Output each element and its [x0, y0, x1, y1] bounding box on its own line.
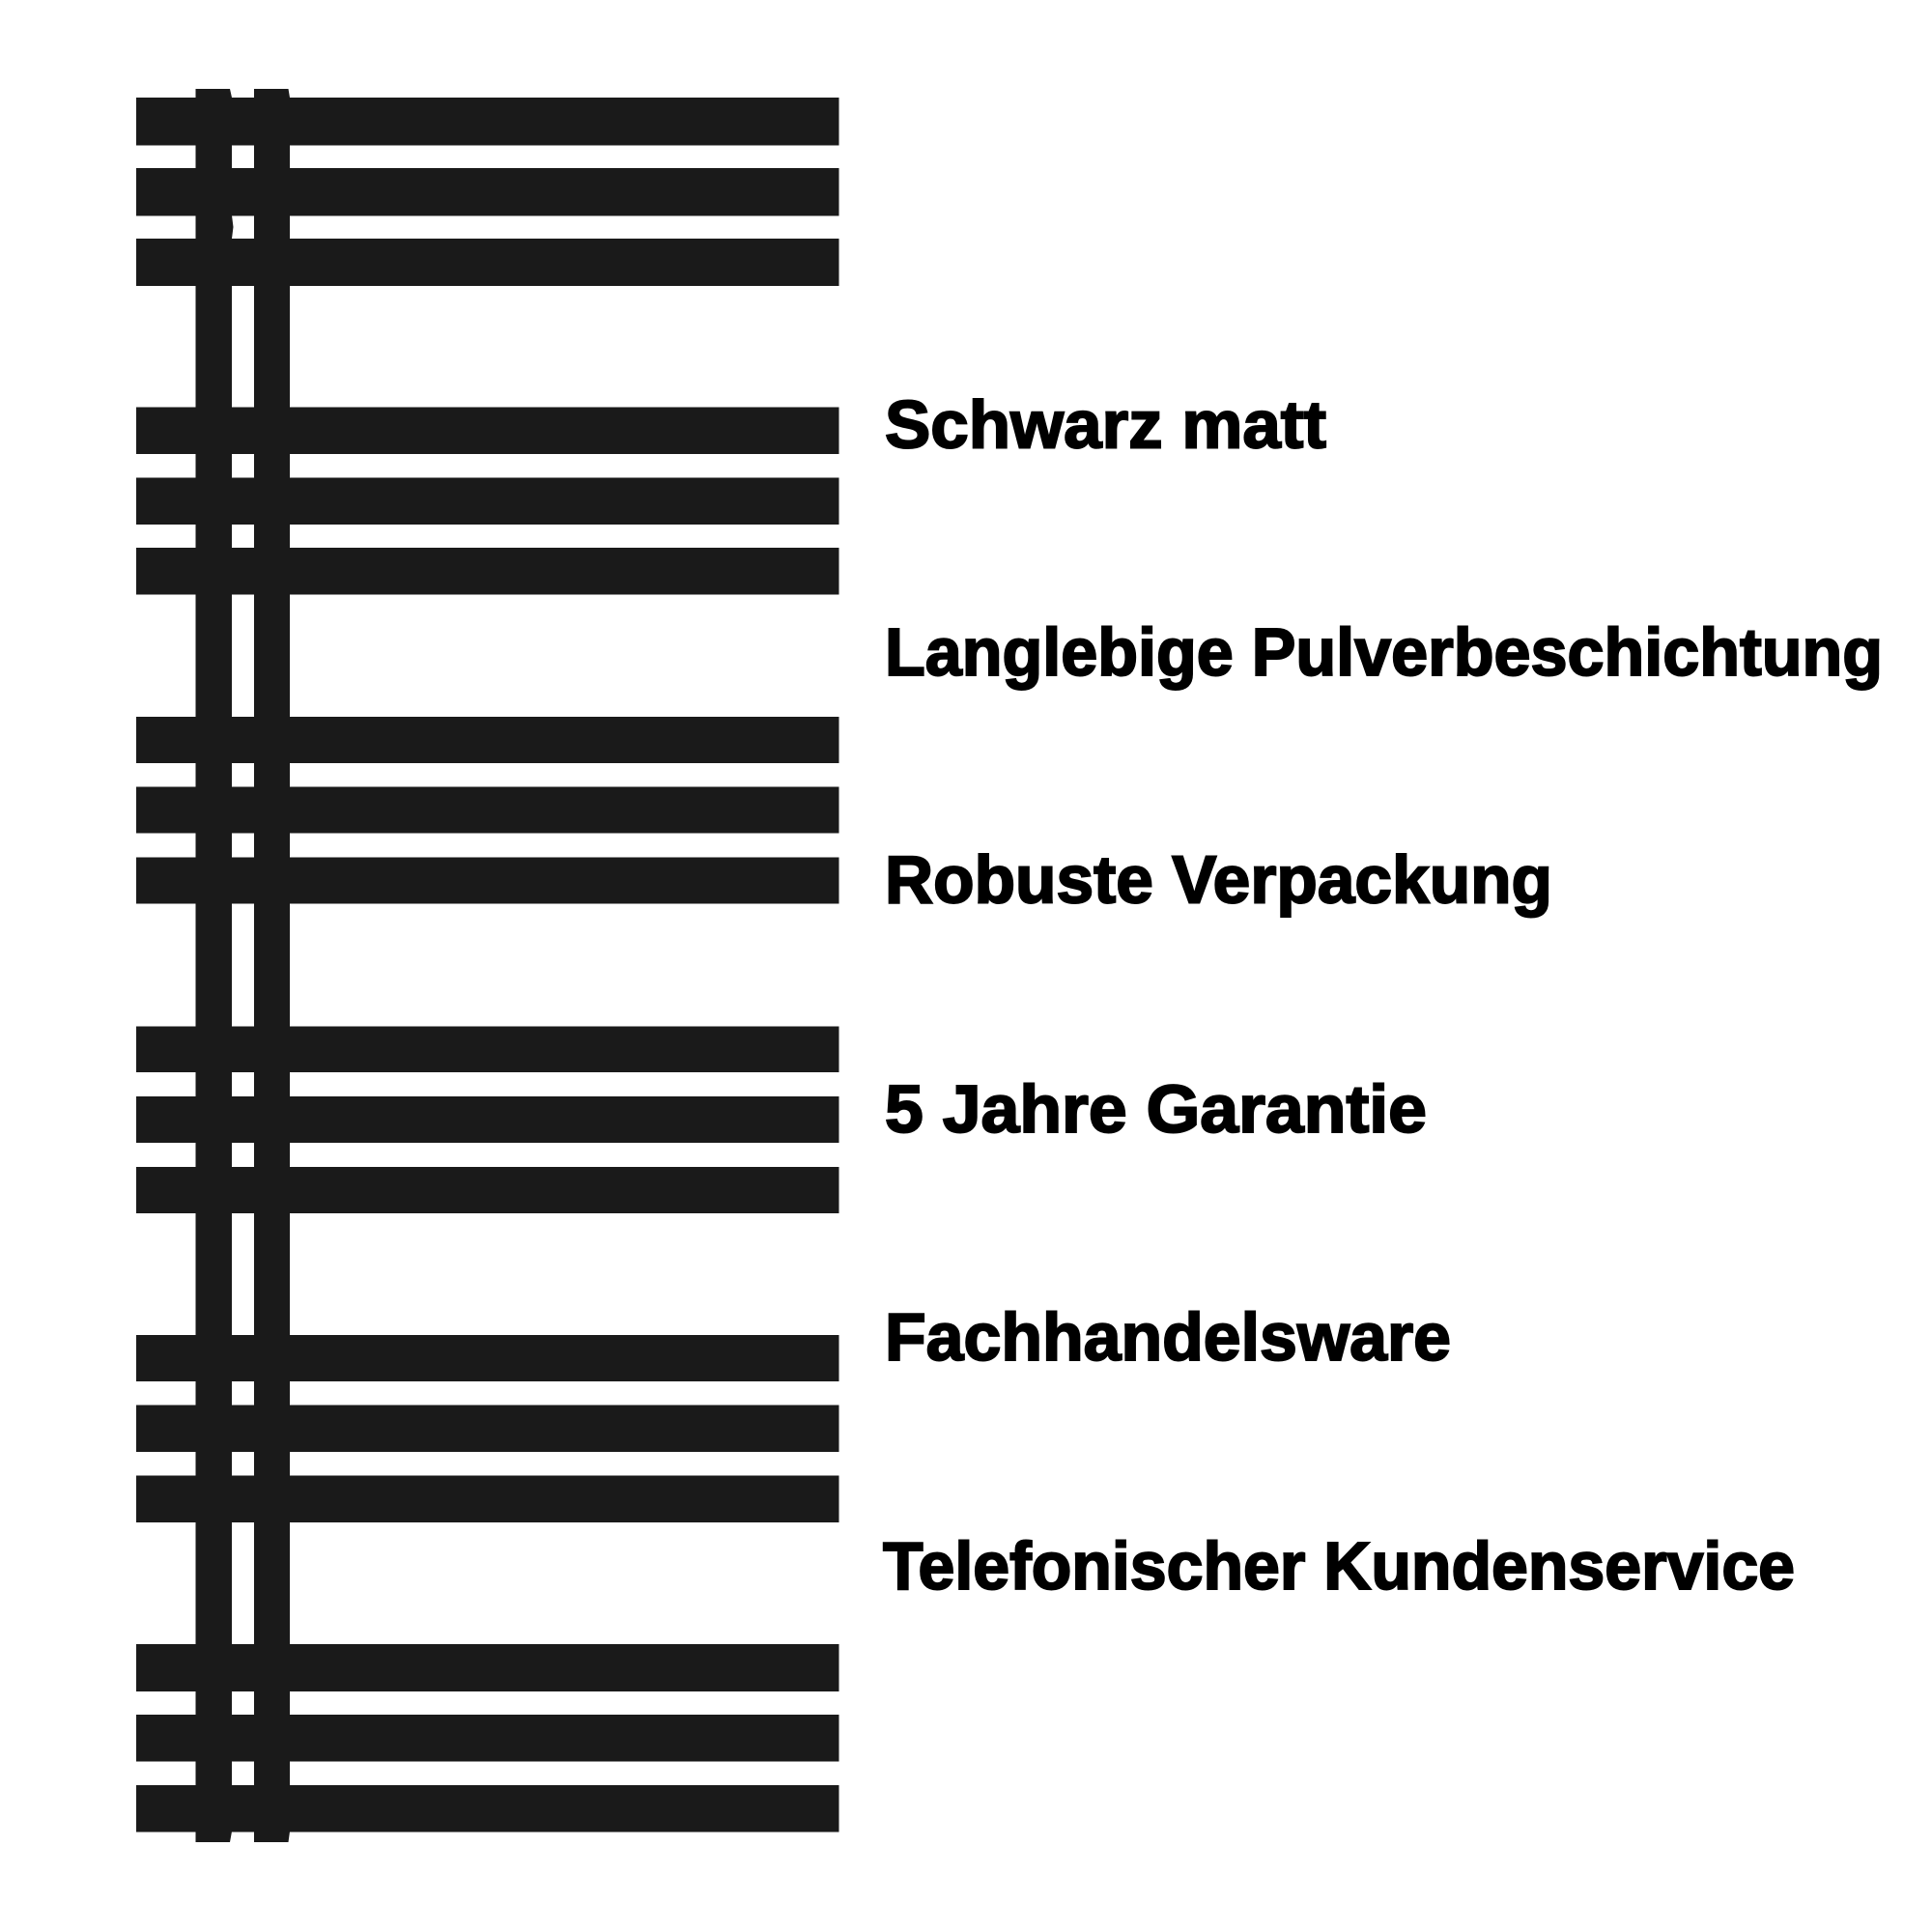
left vertical column [195, 89, 234, 1842]
feature: Telefonischer Kundenservice: Telefonischer Kundenservice [883, 1528, 1795, 1604]
rail group 1 [136, 98, 838, 286]
rail group 2 [136, 408, 838, 595]
feature: Robuste Verpackung: Robuste Verpackung [885, 842, 1552, 918]
rail group 4 [136, 1026, 838, 1213]
feature: 5 Jahre Garantie: 5 Jahre Garantie [885, 1071, 1427, 1147]
rail group 6 [136, 1644, 838, 1832]
feature list [883, 386, 1883, 1604]
feature: Schwarz matt: Schwarz matt [885, 386, 1326, 462]
rail group 3 [136, 717, 838, 904]
towel radiator illustration [136, 89, 838, 1842]
right vertical column [254, 89, 290, 1842]
feature: Fachhandelsware: Fachhandelsware [885, 1299, 1451, 1375]
feature: Langlebige Pulverbeschichtung: Langlebige Pulverbeschichtung [885, 614, 1883, 690]
rail group 5 [136, 1335, 838, 1522]
